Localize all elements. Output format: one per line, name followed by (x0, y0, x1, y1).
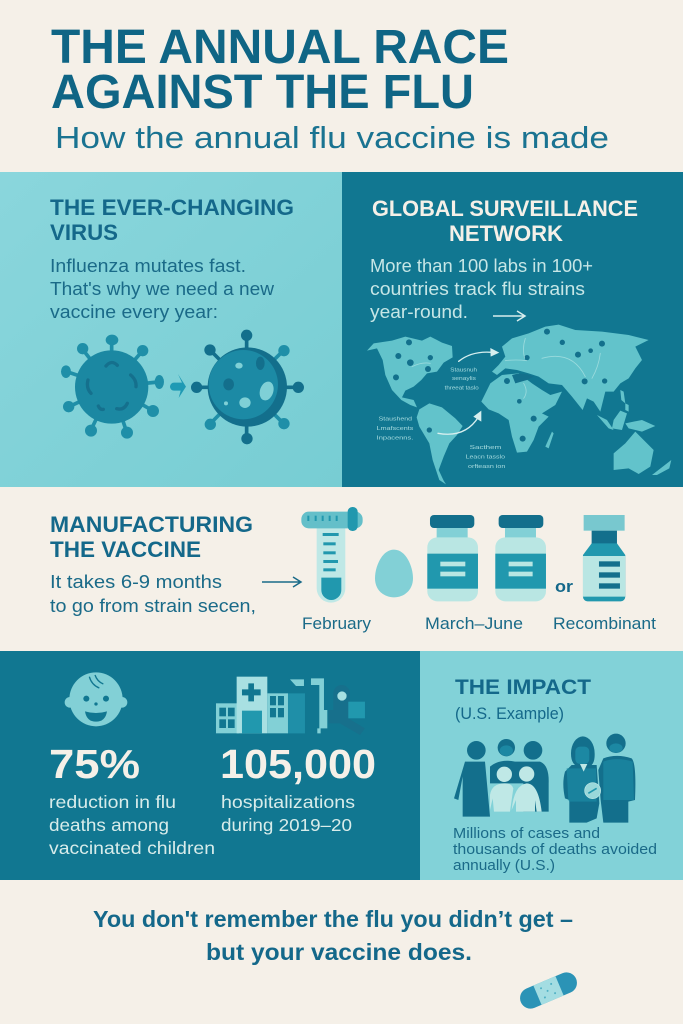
heading: manufacturing: MANUFACTURING (50, 512, 253, 537)
panel: statistics (0, 651, 420, 880)
stat: 105,000: hospitalizations (221, 792, 355, 812)
labels: timeline stages (302, 615, 656, 633)
icon: bandage (517, 969, 580, 1012)
heading: ever-changing virus: VIRUS (50, 220, 118, 245)
heading: ever-changing virus (50, 195, 294, 245)
icon: recombinant bottle (583, 515, 625, 601)
map: small labels: Stausnuh (450, 368, 477, 374)
map: small labels (377, 368, 505, 470)
text: or: or (555, 578, 574, 596)
text: why a new vaccine: That's why we need a new (50, 278, 275, 299)
stat: 105,000: 105,000 (220, 741, 376, 787)
title (51, 21, 509, 119)
map: small labels: Inpacenns. (377, 435, 414, 441)
text: impact summary (453, 825, 657, 874)
world map (367, 325, 671, 484)
icon: vial 2 (495, 515, 546, 601)
text: why a new vaccine: vaccine every year: (50, 301, 218, 322)
map: small labels: orfteasn ion (468, 464, 505, 470)
text: timeline (50, 572, 256, 616)
map: spread arrows (438, 352, 492, 434)
closing message (93, 906, 573, 965)
map: lab dots (393, 329, 607, 442)
icon: couple (563, 734, 635, 823)
text: impact summary: Millions of cases and (453, 825, 600, 842)
title: AGAINST THE FLU (51, 66, 474, 119)
icon: egg (375, 550, 413, 597)
arrow: surveillance text (493, 311, 525, 321)
text: why a new vaccine: Influenza mutates fast. (50, 255, 246, 276)
map: small labels: Leacn tasslo (466, 455, 505, 461)
labels: timeline stages: March–June (425, 615, 523, 633)
stat: 105,000: during 2019–20 (221, 815, 352, 835)
text: timeline: It takes 6-9 months (50, 572, 222, 592)
heading: global surveillance network (372, 196, 638, 246)
panel: the impact (420, 651, 683, 880)
map: continents (367, 325, 671, 484)
icon: original virus (61, 335, 164, 439)
text: why a new vaccine (50, 255, 275, 322)
stat: 75%: 75% (49, 741, 140, 787)
stat: 75%: deaths among (49, 815, 169, 835)
icon: family group (454, 739, 549, 817)
icon: mutated virus (191, 330, 304, 444)
arrow: to test tube (262, 577, 301, 587)
heading: ever-changing virus: THE EVER-CHANGING (50, 195, 294, 220)
subtitle: How the annual flu vaccine is made (55, 120, 609, 155)
map: small labels: Staushend (379, 417, 412, 423)
stat: 75%: reduction in flu (49, 792, 176, 812)
text: labs tracking strains: countries track flu strains (370, 278, 585, 299)
stat: 75%: vaccinated children (49, 838, 215, 858)
icon: hospital (216, 677, 365, 735)
text: labs tracking strains: year-round. (370, 301, 468, 322)
icon: vial 1 (427, 515, 478, 601)
text: timeline: to go from strain secen, (50, 596, 256, 616)
heading: global surveillance network: NETWORK (449, 221, 563, 246)
panel: the ever-changing virus (0, 172, 342, 487)
text: impact summary: thousands of deaths avoided (453, 841, 657, 858)
panel: global surveillance network (342, 172, 683, 487)
map: small labels: senaylis (452, 376, 476, 382)
icon: baby (65, 672, 127, 726)
text: labs tracking strains (370, 255, 593, 322)
stat: 105,000 (220, 741, 376, 835)
heading: manufacturing (50, 512, 253, 562)
arrow: virus mutation (170, 374, 186, 398)
labels: timeline stages: Recombinant (553, 615, 656, 633)
text: labs tracking strains: More than 100 labs in 100+ (370, 255, 593, 276)
map: small labels: threeat taslo (445, 386, 479, 392)
labels: timeline stages: February (302, 615, 372, 633)
title: THE ANNUAL RACE (51, 21, 509, 74)
map: small labels: Lmafscents (377, 426, 414, 432)
subheading: U.S. example: (U.S. Example) (455, 704, 564, 723)
heading: the impact: THE IMPACT (455, 676, 591, 699)
closing message: but your vaccine does. (206, 939, 472, 965)
text: impact summary: annually (U.S.) (453, 857, 555, 874)
heading: global surveillance network: GLOBAL SURVEILLANCE (372, 196, 638, 221)
panel: manufacturing the vaccine (50, 507, 656, 633)
icon: test tube (301, 507, 363, 603)
stat: 75% (49, 741, 215, 858)
map: small labels: Sacthem (470, 445, 502, 451)
closing message: You don't remember the flu you didn’t get – (93, 906, 573, 932)
heading: manufacturing: THE VACCINE (50, 537, 201, 562)
